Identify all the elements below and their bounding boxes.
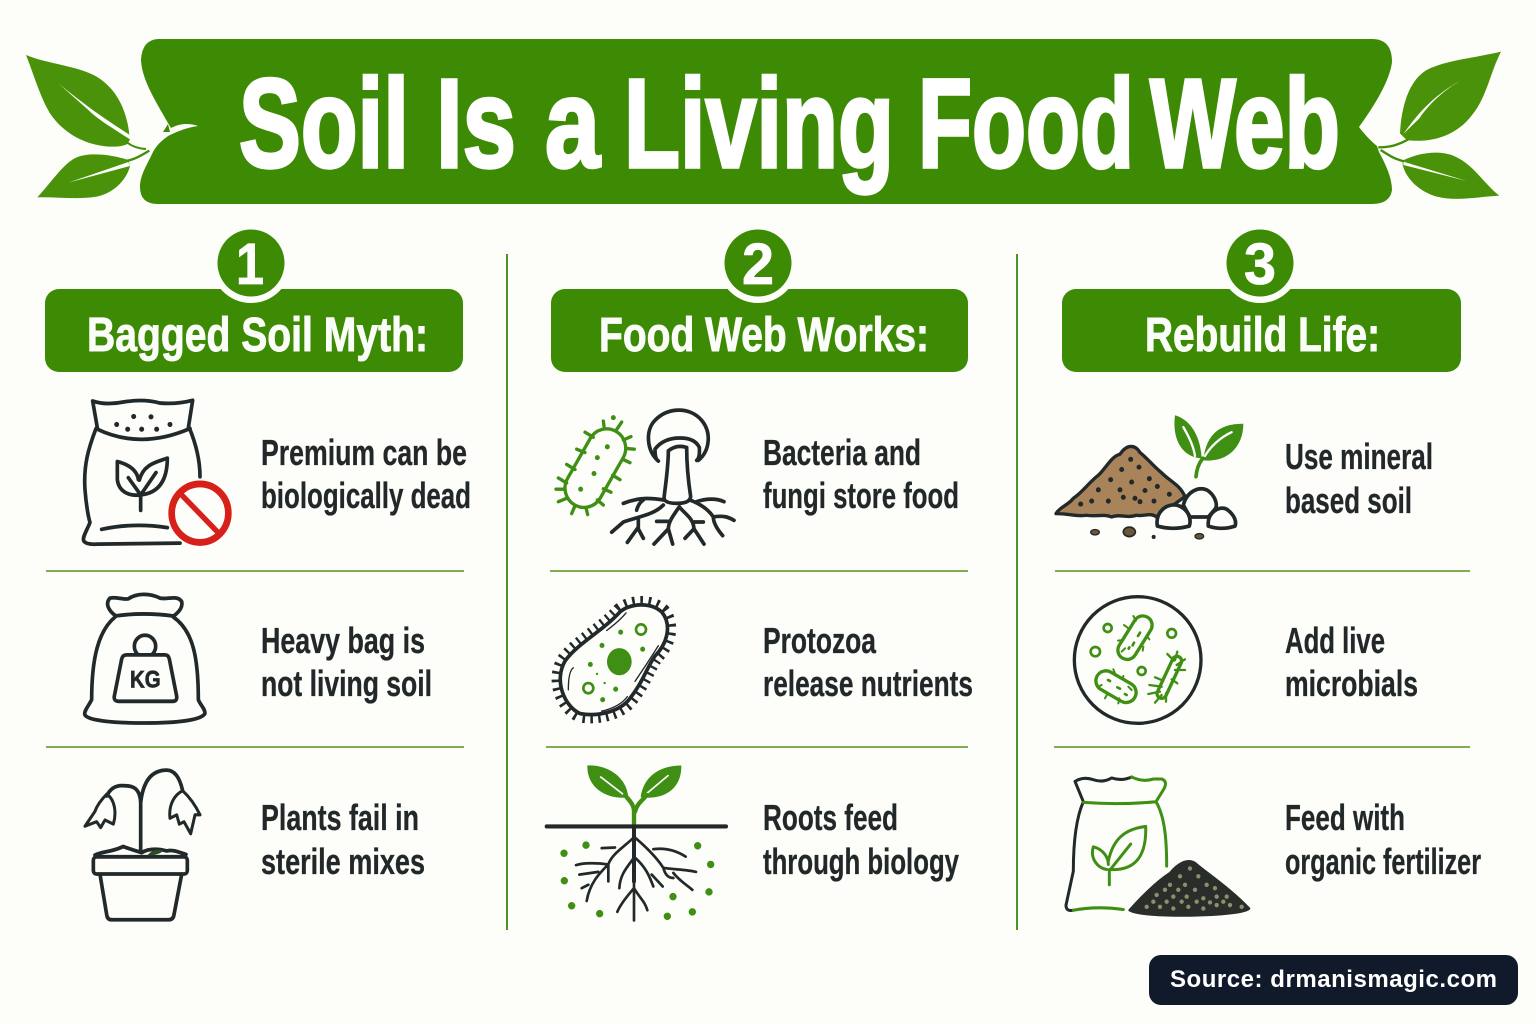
item: roots feed through biology <box>547 765 959 920</box>
heading: food web works <box>551 223 968 372</box>
text: protozoa release nutrients: Protozoa <box>763 620 877 661</box>
text: bacteria and fungi store food <box>763 432 959 516</box>
title banner <box>140 39 1392 204</box>
item: add live microbials <box>1074 597 1418 723</box>
text: heavy bag is not living soil <box>261 620 432 704</box>
title text: Food <box>918 53 1134 194</box>
text: roots feed through biology: Roots feed <box>763 797 898 838</box>
right leaf decoration <box>1378 52 1501 199</box>
text: add live microbials: Add live <box>1285 620 1385 661</box>
item: plants fail in sterile mixes <box>85 770 425 920</box>
text: bacteria and fungi store food: Bacteria and <box>763 432 921 473</box>
text: roots feed through biology <box>763 797 959 882</box>
title text: a <box>545 53 601 194</box>
source badge: Source: drmanismagic.com <box>1170 966 1497 993</box>
icon: bacterium and mushroom with roots <box>556 410 734 544</box>
item: feed with organic fertilizer <box>1066 777 1481 916</box>
heading: food web works: 2 <box>742 232 774 297</box>
heading: bagged soil myth: 1 <box>236 232 264 297</box>
heading: bagged soil myth <box>45 223 463 372</box>
icon: soil bag with prohibition sign <box>83 400 228 544</box>
source badge <box>1149 955 1518 1005</box>
item: use mineral based soil <box>1056 415 1433 539</box>
title text: Is <box>436 53 516 194</box>
heading: food web works: Food Web Works: <box>599 309 929 362</box>
item: bacteria and fungi store food <box>556 410 959 544</box>
panel: rebuild life <box>1056 223 1481 916</box>
icon: fertilizer bag with granule pile <box>1066 777 1249 916</box>
text: premium can be biologically dead <box>261 432 471 516</box>
icon: sprout with roots and soil microbes <box>547 765 726 920</box>
text: heavy bag is not living soil: Heavy bag is <box>261 620 425 661</box>
text: protozoa release nutrients <box>763 620 973 704</box>
icon: mineral soil pile with rocks and sprout <box>1056 415 1243 539</box>
text: premium can be biologically dead: biologically dead <box>261 475 471 516</box>
text: feed with organic fertilizer: Feed with <box>1285 797 1405 838</box>
heading: bagged soil myth: Bagged Soil Myth: <box>87 309 428 362</box>
text: feed with organic fertilizer <box>1285 797 1481 882</box>
item: heavy bag is not living soil <box>85 594 432 723</box>
text: protozoa release nutrients: release nutrients <box>763 663 973 704</box>
title text: Soil <box>239 53 409 194</box>
text: premium can be biologically dead: Premium can be <box>261 432 467 473</box>
icon: heavy kg bag <box>85 594 205 723</box>
panel: food web works <box>547 223 973 920</box>
text: use mineral based soil <box>1285 436 1433 521</box>
title text <box>239 53 1340 194</box>
text: add live microbials <box>1285 620 1418 704</box>
icon: protozoa cell <box>560 605 667 715</box>
text: plants fail in sterile mixes <box>261 797 425 882</box>
title text: Web <box>1150 53 1340 194</box>
item: premium can be biologically dead <box>83 400 471 544</box>
heading: rebuild life <box>1062 223 1461 372</box>
icon: petri dish with microbes <box>1074 597 1201 723</box>
text: use mineral based soil: based soil <box>1285 480 1412 521</box>
heading: rebuild life: Rebuild Life: <box>1145 309 1380 362</box>
icon: heavy kg bag: KG <box>130 667 161 694</box>
text: bacteria and fungi store food: fungi store food <box>763 475 959 516</box>
heading: rebuild life: 3 <box>1244 232 1276 297</box>
text: plants fail in sterile mixes: Plants fail in <box>261 797 419 838</box>
panel: bagged soil myth <box>45 223 471 920</box>
title text: Living <box>624 53 894 194</box>
text: use mineral based soil: Use mineral <box>1285 436 1433 477</box>
item: protozoa release nutrients <box>560 605 973 715</box>
text: heavy bag is not living soil: not living soil <box>261 663 432 704</box>
left leaf decoration <box>26 55 149 198</box>
icon: wilted plant in pot <box>85 770 200 920</box>
text: add live microbials: microbials <box>1285 663 1418 704</box>
text: plants fail in sterile mixes: sterile mixes <box>261 841 425 882</box>
text: roots feed through biology: through biology <box>763 841 959 882</box>
